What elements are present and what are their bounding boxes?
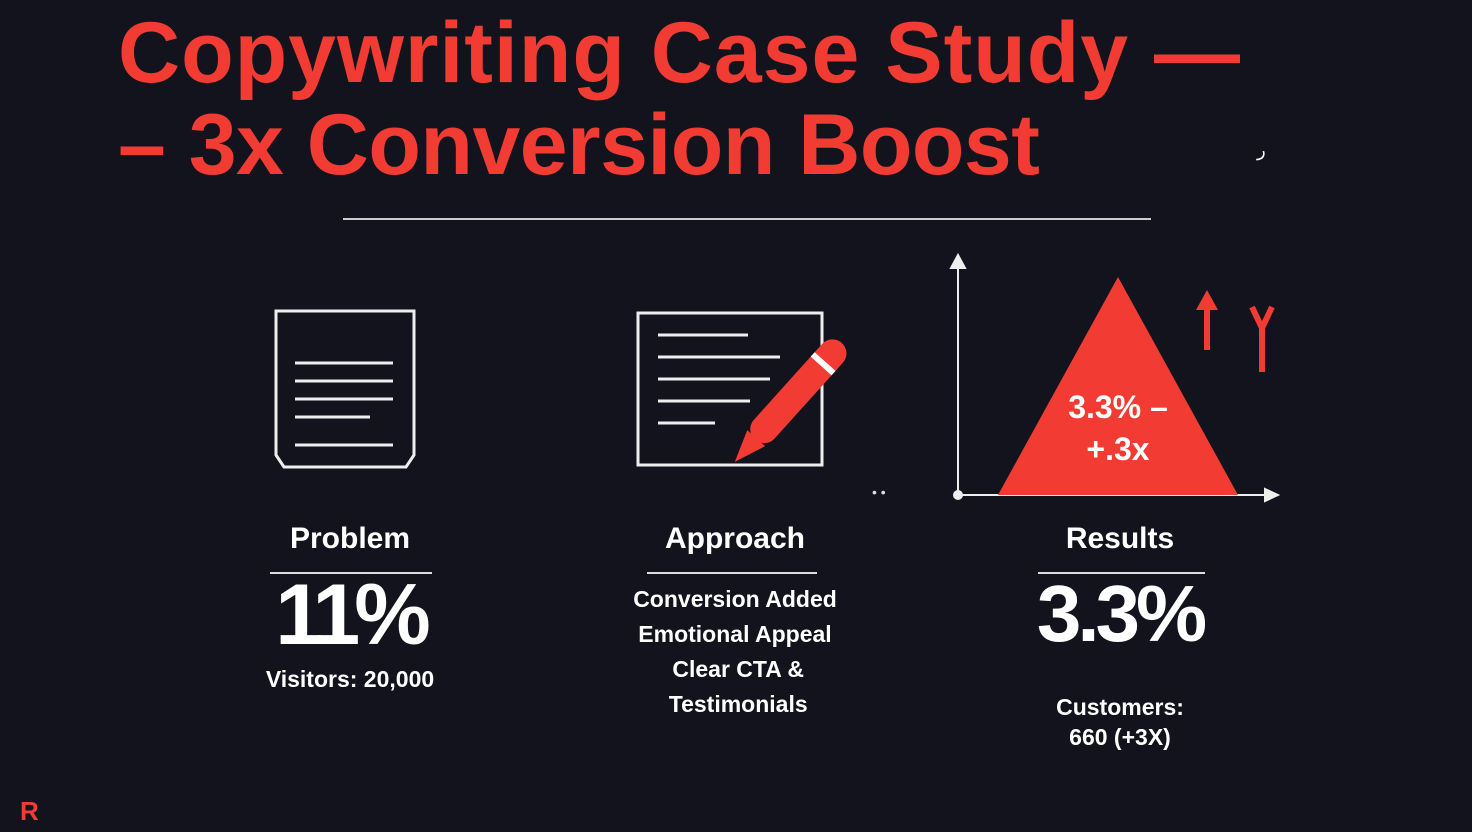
icon: document with pen bbox=[636, 312, 846, 466]
panel: approach: Emotional Appeal bbox=[638, 621, 832, 647]
panel: results: Customers: bbox=[1056, 694, 1184, 720]
icon: document bbox=[274, 310, 416, 468]
panel: results: Results bbox=[1066, 522, 1174, 555]
panel: approach bbox=[633, 522, 837, 717]
panel: problem bbox=[266, 522, 434, 692]
title: Copywriting Case Study — bbox=[118, 5, 1241, 101]
title bbox=[118, 5, 1241, 193]
title: – 3x Conversion Boost bbox=[118, 97, 1039, 193]
panel: results bbox=[1037, 522, 1205, 750]
panel: problem: 11% bbox=[275, 567, 425, 663]
tick mark: ر bbox=[1257, 140, 1266, 160]
panel: approach: Conversion Added bbox=[633, 586, 837, 612]
logo: R bbox=[20, 796, 39, 826]
panel: approach: Testimonials bbox=[669, 691, 808, 717]
chart: results triangle bbox=[949, 253, 1280, 503]
chart: results triangle: +.3x bbox=[1086, 431, 1150, 467]
panel: problem: Problem bbox=[290, 522, 410, 555]
panel: results: 660 (+3X) bbox=[1069, 724, 1171, 750]
panel: approach: Approach bbox=[665, 522, 805, 555]
chart: results triangle: 3.3% – bbox=[1068, 389, 1168, 425]
dots: • • bbox=[872, 484, 886, 500]
panel: results: 3.3% bbox=[1037, 569, 1203, 658]
panel: approach: Clear CTA & bbox=[672, 656, 804, 682]
panel: problem: Visitors: 20,000 bbox=[266, 666, 434, 692]
